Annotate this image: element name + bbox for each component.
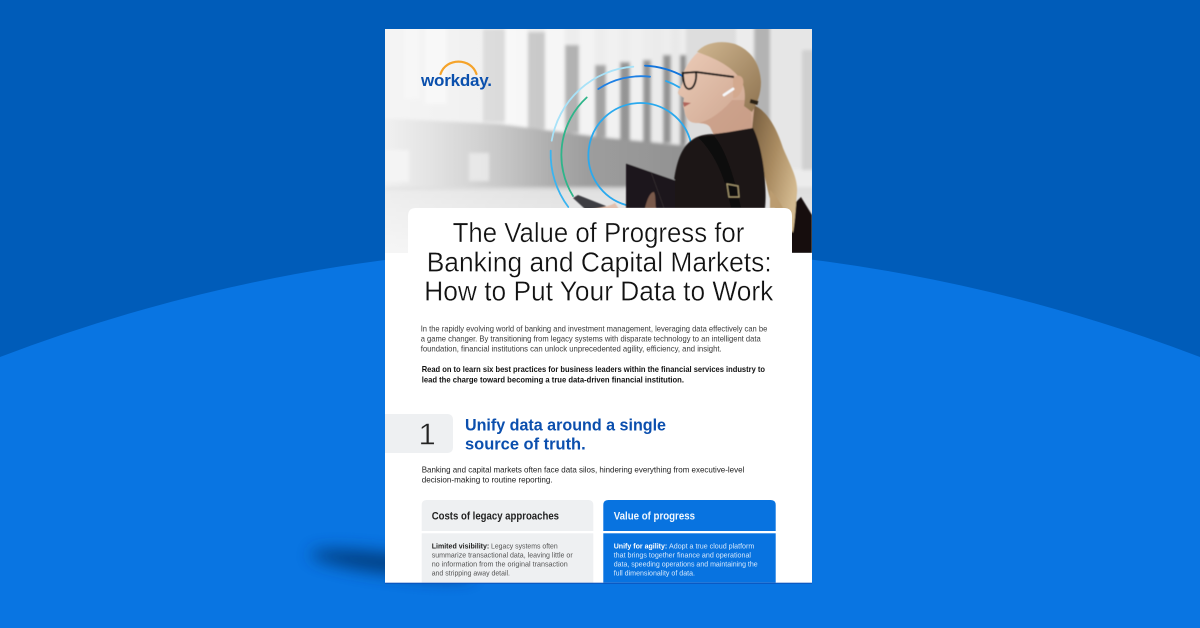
panel: costs of legacy approaches: Limited visibility: — [432, 541, 489, 550]
panel: value of progress: full dimensionality of data. — [614, 568, 695, 577]
hero photo — [380, 24, 817, 258]
section heading — [465, 416, 666, 453]
photo: left fade — [385, 29, 548, 243]
panel: costs of legacy approaches — [422, 500, 593, 583]
document shadow — [309, 544, 475, 584]
section number box — [385, 414, 453, 453]
hair tie — [750, 99, 758, 105]
logo wordmark: workday. — [420, 71, 492, 90]
panel: costs of legacy approaches: and stripping away detail. — [432, 568, 510, 577]
panel: costs of legacy approaches: Legacy systems often — [491, 541, 558, 550]
document bottom edge — [385, 583, 812, 584]
title: The Value of Progress for — [453, 217, 744, 248]
background: bright blue curved shape — [0, 246, 1200, 628]
panel: value of progress: Adopt a true cloud platform — [669, 541, 754, 550]
section description: Banking and capital markets often face data silos, hindering everything from executive-level — [422, 464, 744, 474]
ponytail — [749, 104, 797, 233]
document page — [380, 24, 817, 584]
dark bag lower right — [792, 196, 812, 253]
tablet — [626, 163, 675, 208]
logo: workday — [420, 62, 492, 90]
panel: costs of legacy approaches: summarize transactional data, leaving little or — [432, 550, 573, 559]
photo: woman — [573, 42, 812, 253]
photo: building — [380, 24, 817, 258]
glasses — [683, 72, 734, 89]
head hair — [697, 42, 761, 112]
strap buckle — [727, 184, 739, 197]
neck and face — [678, 50, 757, 135]
neck shadow — [700, 100, 750, 134]
jacket — [673, 128, 766, 208]
earbud — [724, 89, 733, 95]
intro paragraph: a game changer. By transitioning from legacy systems with disparate technology to an intelligent data — [421, 334, 761, 344]
ear — [733, 76, 743, 98]
title: Banking and Capital Markets: — [427, 246, 772, 278]
bold call to read on: Read on to learn six best practices for business leaders within the financial services industry to — [422, 364, 765, 374]
intro paragraph: In the rapidly evolving world of banking and investment management, leveraging data effectively can be — [421, 324, 768, 334]
panel: value of progress: that brings together finance and operational — [614, 550, 751, 559]
page sheet — [385, 29, 812, 583]
panel body — [603, 533, 776, 583]
lips — [683, 102, 691, 107]
section heading: Unify data around a single — [465, 416, 666, 435]
panel: costs of legacy approaches: no information from the original transaction — [432, 559, 568, 568]
intro paragraph — [421, 324, 768, 353]
panel: costs of legacy approaches: Costs of legacy approaches — [432, 510, 559, 522]
hand on tablet — [645, 192, 656, 208]
title: How to Put Your Data to Work — [424, 276, 774, 306]
panel header — [603, 500, 776, 531]
intro paragraph: foundation, financial institutions can unlock unprecedented agility, efficiency, and insight. — [421, 343, 722, 353]
panel: value of progress: data, speeding operations and maintaining the — [614, 559, 758, 568]
panel header — [422, 500, 593, 531]
section heading: source of truth. — [465, 434, 586, 453]
photo: dark lower storey — [401, 120, 687, 189]
section description — [422, 464, 744, 485]
section description: decision-making to routine reporting. — [422, 475, 553, 485]
bold call to read on — [422, 364, 765, 384]
panel: value of progress: Unify for agility: — [614, 541, 667, 550]
hand — [592, 202, 619, 208]
phone — [573, 195, 606, 209]
bold call to read on: lead the charge toward becoming a true data-driven financial institution. — [422, 374, 684, 384]
title card — [408, 208, 792, 253]
panel: value of progress: Value of progress — [614, 510, 695, 522]
bag strap — [698, 136, 741, 208]
panel: value of progress — [603, 500, 776, 583]
section number box: 1 — [418, 416, 436, 452]
title — [424, 217, 774, 306]
icon: concentric progress arcs — [551, 66, 691, 207]
panel body — [422, 533, 593, 583]
logo arc — [440, 62, 476, 74]
lower hair — [769, 192, 782, 208]
photo: street — [421, 188, 812, 208]
